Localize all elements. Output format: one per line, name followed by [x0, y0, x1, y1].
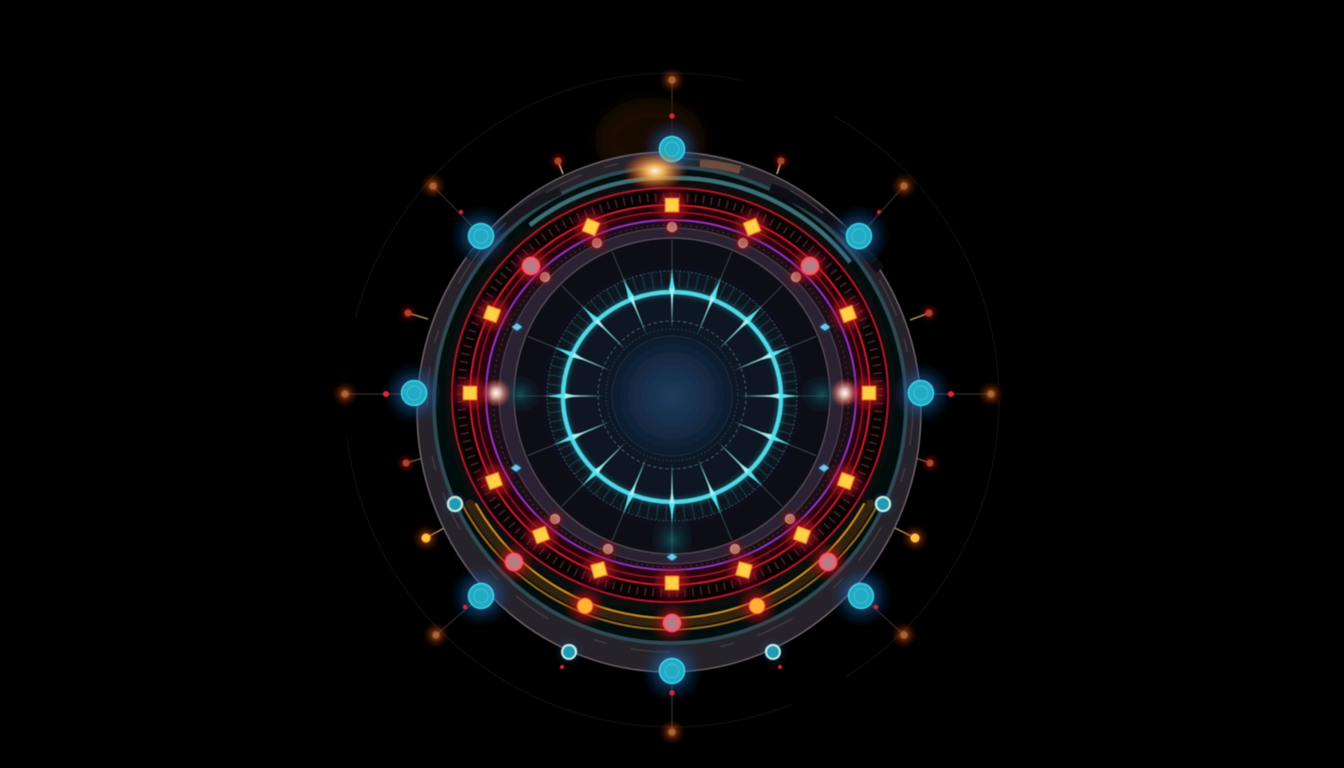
- square yellow nodes: [447, 182, 892, 606]
- cyan ring spokes: [516, 240, 828, 552]
- big cyan nodes: [382, 117, 953, 703]
- inner mini nodes: [507, 215, 834, 566]
- panel: dark inner core: [514, 238, 830, 554]
- white hot nodes left and right: [481, 378, 860, 408]
- dashed inner rings: [598, 321, 746, 469]
- outer connector lines: [345, 80, 991, 732]
- orange round nodes: [563, 584, 779, 628]
- panel: inner band with purple ring: [486, 220, 856, 570]
- panel: outer translucent band: [417, 152, 921, 672]
- cyan ring: [563, 292, 781, 502]
- warm haze above top node: [595, 98, 705, 182]
- outer orange nodes: [331, 66, 1005, 746]
- dashed outer tick boundary: [547, 271, 797, 521]
- panel: red glow zone: [452, 188, 888, 602]
- tick ring around cyan ring: [555, 279, 789, 513]
- small cyan white-rimmed nodes: [439, 488, 899, 668]
- top orange flare: [623, 151, 687, 191]
- cyan ring glow: [563, 292, 781, 502]
- small red relay dots: [383, 114, 954, 696]
- gold lower arcs: [462, 504, 878, 630]
- outer red small nodes: [396, 151, 940, 473]
- faint outer orbit: [345, 73, 999, 727]
- ring diagram soft wrapper: [331, 66, 1005, 746]
- pink ring nodes: [492, 244, 850, 645]
- bright orange side nodes: [411, 523, 930, 553]
- teal side glows: [498, 372, 844, 564]
